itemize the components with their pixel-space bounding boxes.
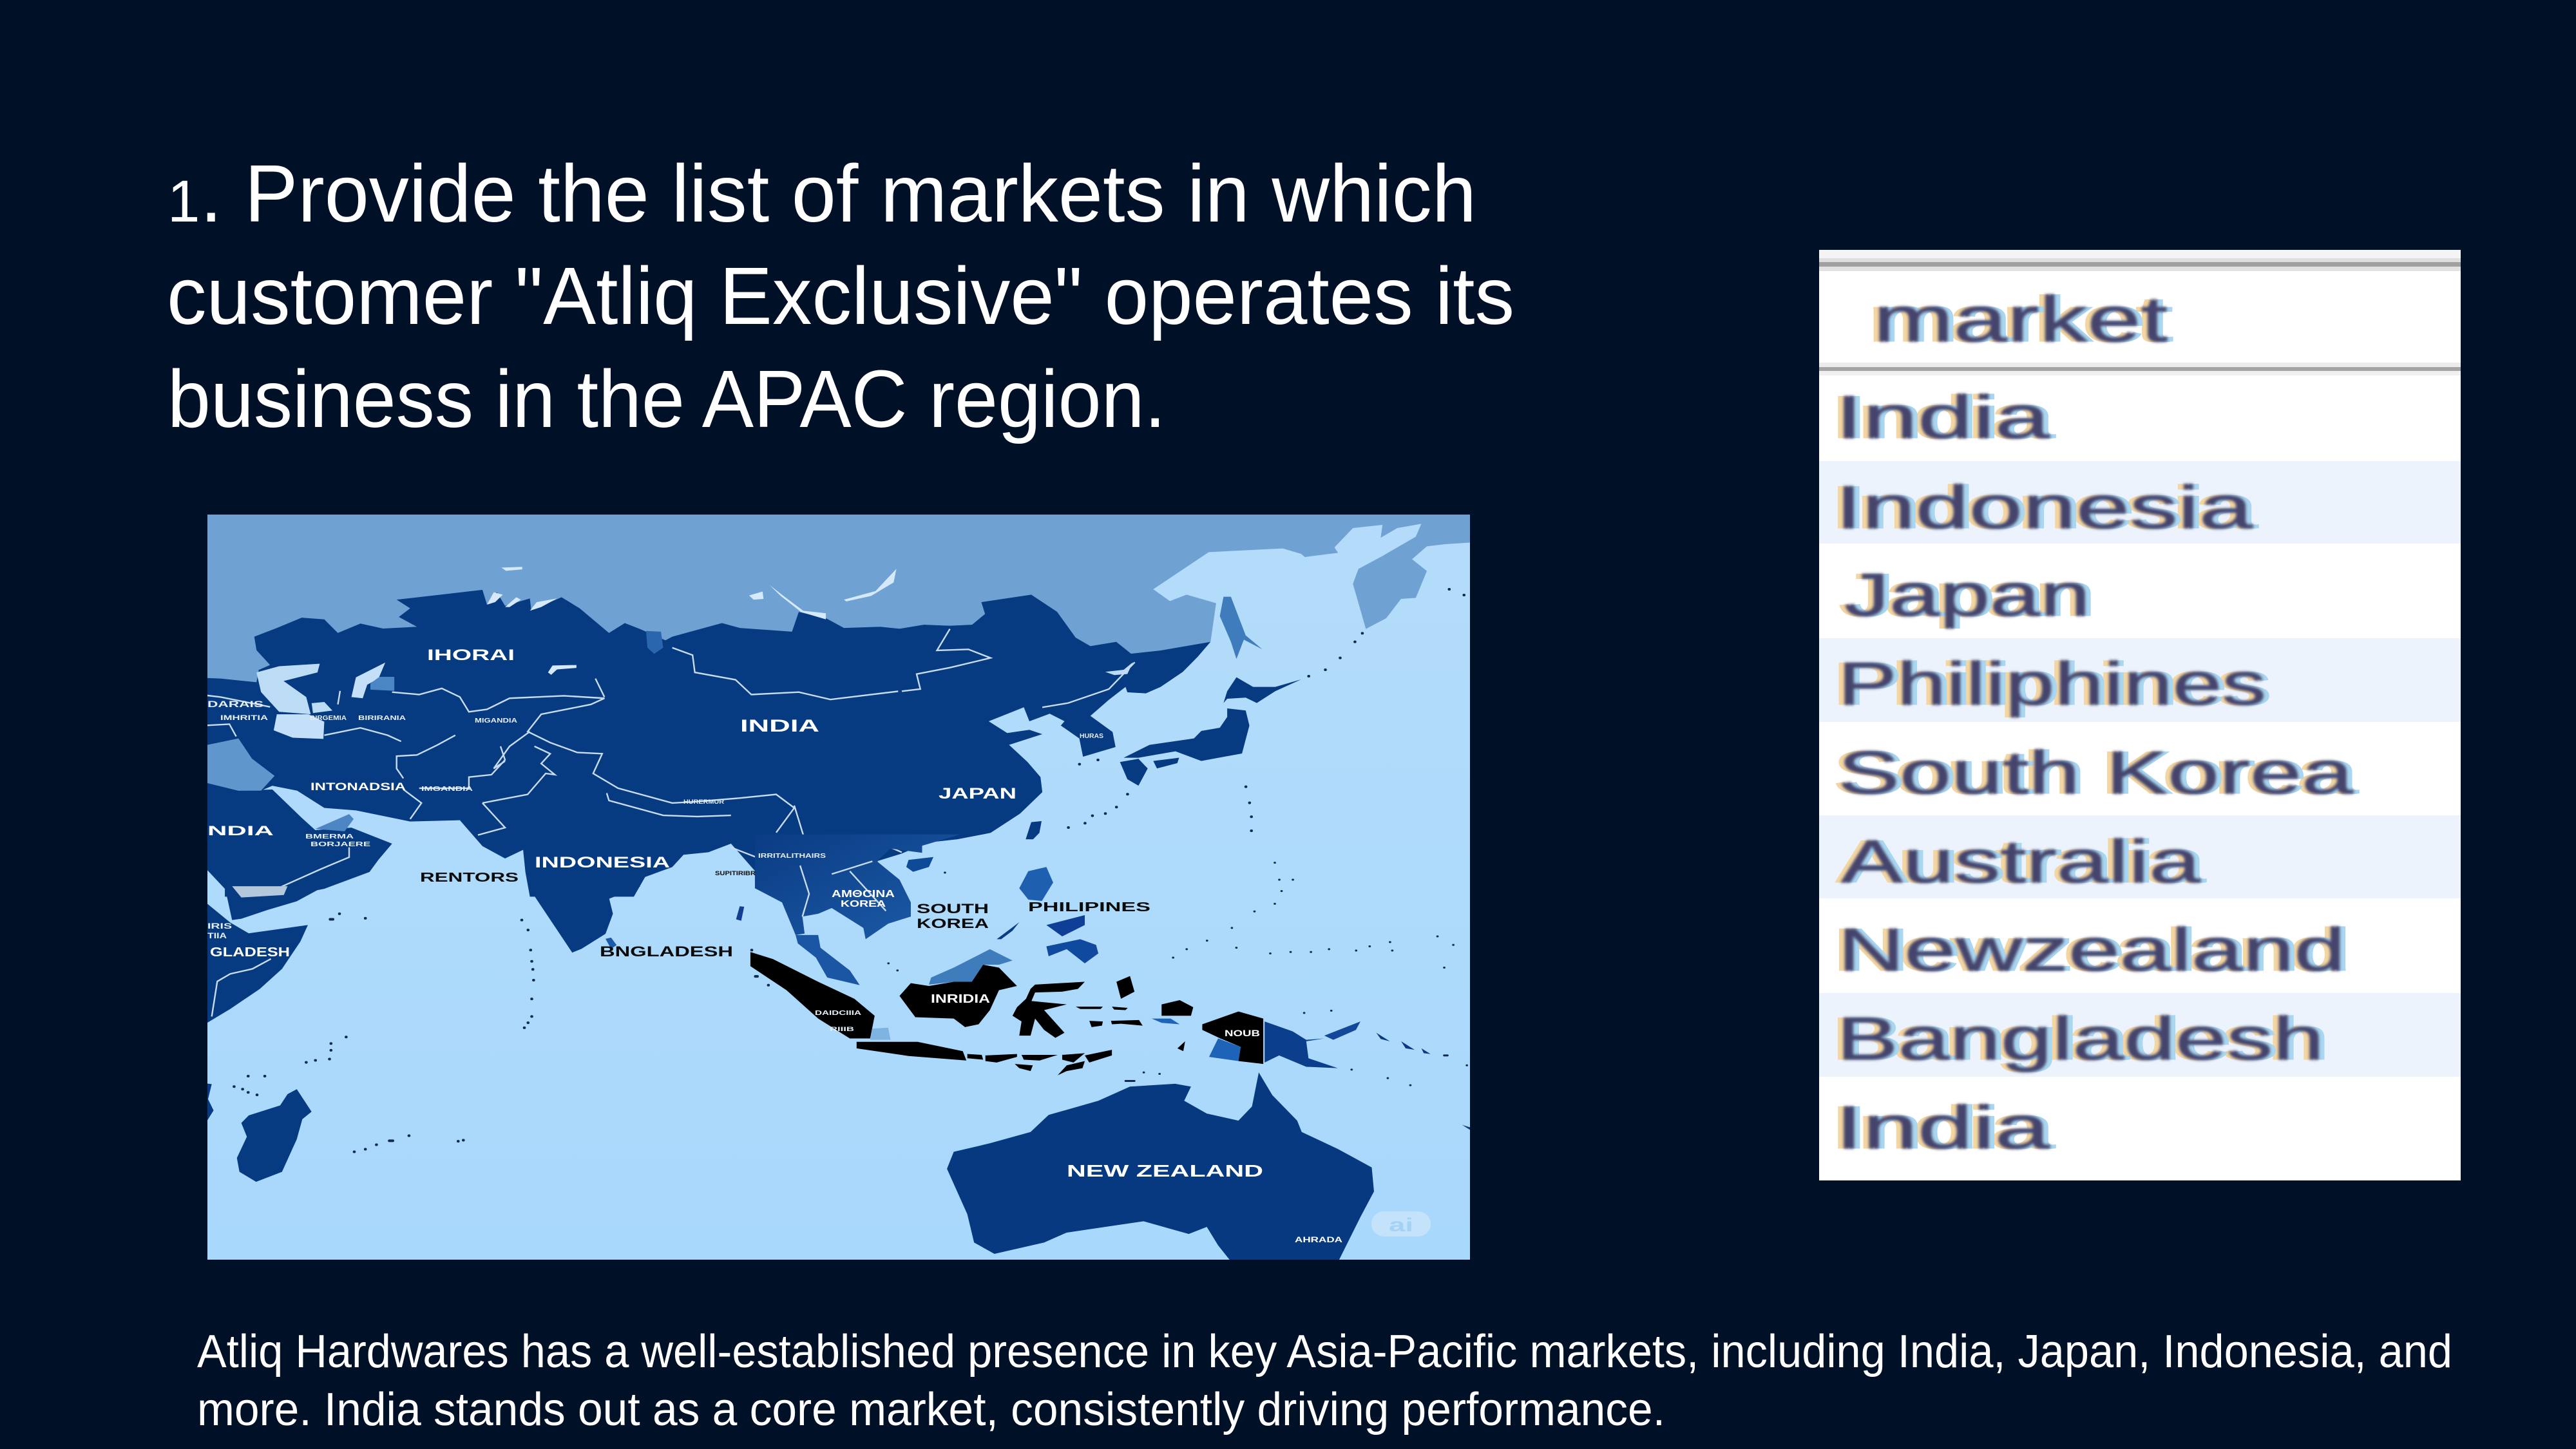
land: China, Korea and Japan <box>898 589 1464 846</box>
map labels: TIIA <box>207 931 227 940</box>
table text: Philiphines <box>1838 650 2266 717</box>
map labels: AMΘCINA <box>832 889 895 900</box>
table text: South Korea <box>1838 739 2354 806</box>
title <box>167 148 1514 444</box>
summary text: more. India stands out as a core market, consistently driving performance. <box>197 1384 1665 1435</box>
map labels: PHILIPINES <box>1028 900 1150 914</box>
table text: Australia <box>1841 828 2201 895</box>
table text: Bangladesh <box>1837 1005 2324 1072</box>
summary text <box>197 1326 2452 1435</box>
land: Southeast Asia, Indonesia, Philippines, Australia <box>750 835 1471 1262</box>
map labels: NDIA <box>207 824 274 838</box>
map labels: IRIS <box>207 922 232 931</box>
alternating row stripes <box>1819 461 2461 1077</box>
map labels: IMHRITIA <box>220 714 268 722</box>
market table <box>1819 250 2461 1180</box>
table text: Indonesia <box>1835 473 2253 541</box>
map labels: KOREA <box>917 916 989 931</box>
watermark badge <box>1371 1211 1431 1236</box>
map labels: SUPITIRIBR <box>715 870 756 876</box>
map labels: MIGANDIA <box>475 717 517 724</box>
table text: India <box>1835 1094 2050 1161</box>
country borders <box>189 648 902 889</box>
north coast islets <box>487 567 897 675</box>
map labels: BIRGEMIA <box>310 715 347 722</box>
table header rules <box>1819 250 2461 375</box>
summary text: Atliq Hardwares has a well-established presence in key Asia-Pacific markets, including India, Japan, Indonesia, and <box>197 1326 2452 1378</box>
watermark badge: ai <box>1389 1215 1413 1236</box>
map labels: INDIA <box>740 716 819 735</box>
map labels: SOUTH <box>917 902 989 916</box>
map labels: DAIDCIIIA <box>815 1010 861 1017</box>
map labels: RIIIB <box>830 1026 855 1032</box>
map labels: BIRIRANIA <box>358 715 406 722</box>
map labels: AHRADA <box>1295 1235 1342 1244</box>
map labels: IMGANDIA <box>421 786 473 793</box>
map labels: DARAIS <box>207 699 263 709</box>
map labels: JAPAN <box>939 785 1016 802</box>
title: business in the APAC region. <box>167 354 1166 444</box>
map labels: BORJAERE <box>310 841 371 848</box>
map labels: HURERMUR <box>683 799 725 805</box>
map labels: INRIDIA <box>931 992 990 1005</box>
land: Arabia south, Africa, India, Madagascar <box>189 886 768 1182</box>
map labels: KOREA <box>841 898 886 909</box>
title: 1. Provide the list of markets in which <box>167 148 1476 239</box>
table text: market <box>1873 283 2168 355</box>
map labels: HURAS <box>1080 733 1103 740</box>
map of Asia-Pacific <box>207 515 1470 1260</box>
map labels: BMERMA <box>305 833 354 840</box>
map labels: INDONESIA <box>535 854 670 871</box>
land: central and west Asia <box>189 567 916 896</box>
table text: Japan <box>1844 561 2090 629</box>
map labels <box>207 647 1342 1244</box>
table text <box>1835 283 2354 1161</box>
map labels: IRRITALITHAIRS <box>758 853 826 860</box>
map labels: INTONADSIA <box>310 781 406 793</box>
table text: India <box>1835 383 2050 451</box>
map labels: NEW ZEALAND <box>1067 1161 1263 1180</box>
land: northeast Russia <box>891 513 1478 659</box>
map labels: GLADESH <box>210 945 290 960</box>
map labels: RENTORS <box>420 871 519 885</box>
map labels: BNGLADESH <box>600 943 733 960</box>
map labels: NOUB <box>1225 1028 1260 1038</box>
map labels: IHORAI <box>427 647 515 664</box>
table text: Newzealand <box>1838 916 2345 983</box>
title: customer "Atliq Exclusive" operates its <box>167 251 1514 341</box>
